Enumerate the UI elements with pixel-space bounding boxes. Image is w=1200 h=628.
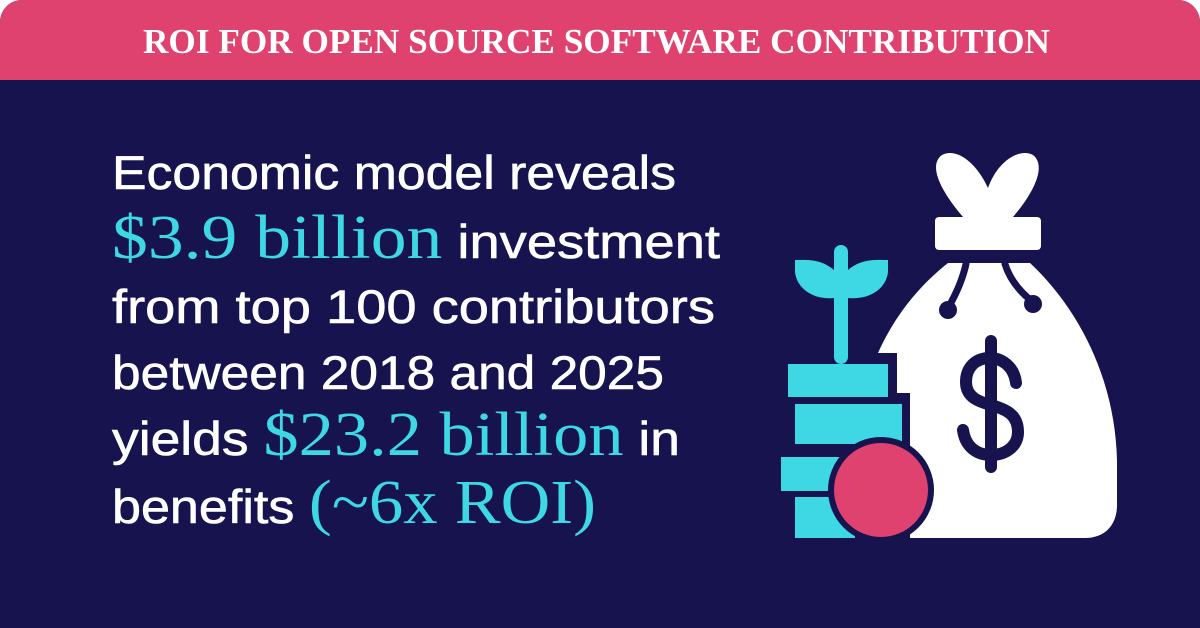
dollar sign (963, 341, 1018, 467)
headline text block: between 2018 and 2025 (112, 346, 664, 399)
headline text block: from top 100 contributors (112, 280, 715, 333)
bag body (878, 263, 1117, 538)
title: ROI FOR OPEN SOURCE SOFTWARE CONTRIBUTION (143, 22, 1050, 61)
headline text block: yields $23.2 billion in (112, 401, 680, 469)
bag band (935, 217, 1041, 250)
headline text block: $3.9 billion investment (112, 204, 720, 272)
coin stack (781, 364, 902, 538)
icon: money bag with coins and plant (781, 153, 1117, 543)
headline text block: benefits (~6x ROI) (112, 469, 596, 537)
plant (795, 245, 888, 364)
header bar (0, 0, 1200, 80)
bag bow (936, 153, 1039, 217)
pink coin (828, 437, 934, 543)
headline text block (112, 146, 720, 537)
bag strings (948, 264, 1033, 308)
headline text block: Economic model reveals (112, 146, 676, 199)
